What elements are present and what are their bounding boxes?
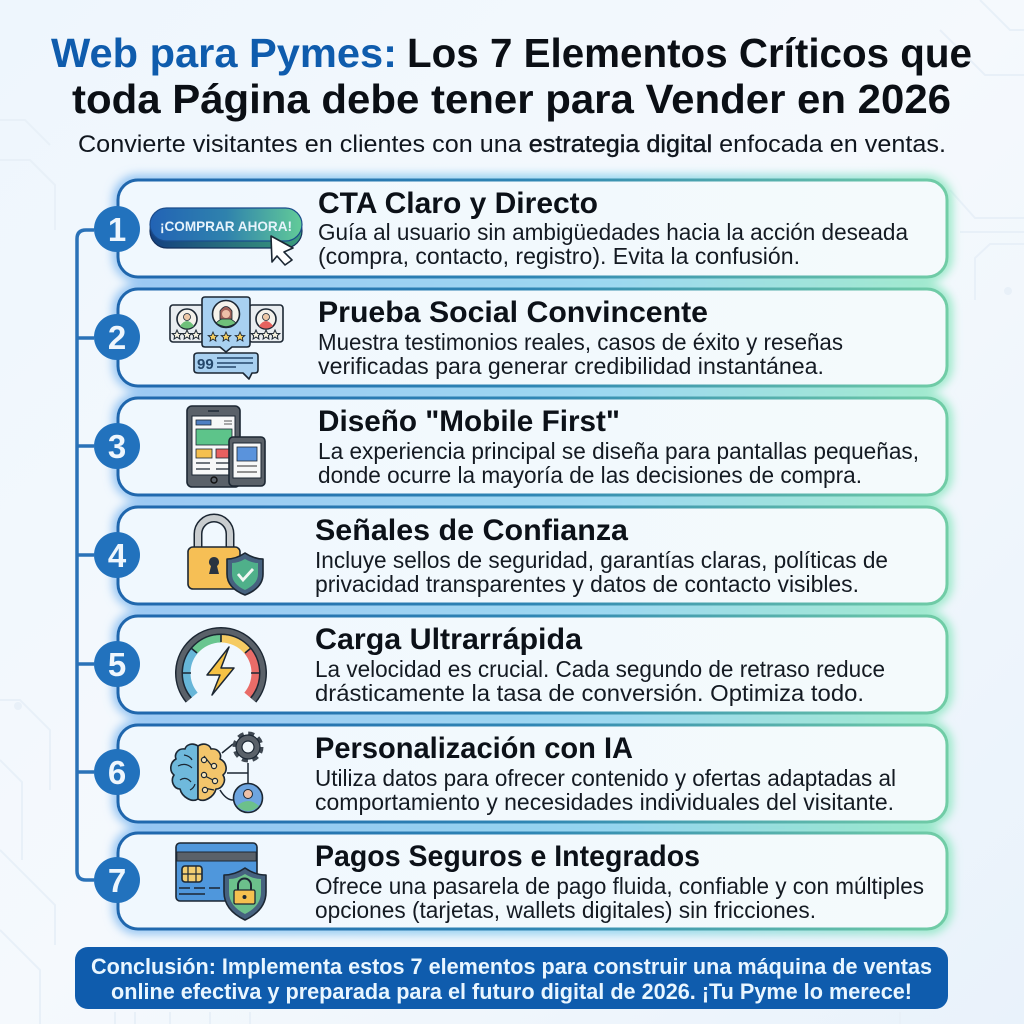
icon: padlock and shield <box>188 518 263 595</box>
text block 6 <box>315 765 896 815</box>
number badge 6 <box>94 749 140 795</box>
heading 6: Personalización con IA <box>315 732 633 765</box>
number badge 5 <box>94 641 140 687</box>
number badge 7 <box>94 857 140 903</box>
text block 1 <box>318 219 909 269</box>
text block 1: (compra, contacto, registro). Evita la confusión. <box>318 243 800 269</box>
panel: card 7 payments <box>94 833 947 929</box>
number badge 1: 1 <box>108 211 126 248</box>
icon: AI brain with gear and user <box>171 734 262 812</box>
conclusion banner <box>75 947 948 1009</box>
icon: tablet and phone <box>187 406 265 487</box>
heading 4: Señales de Confianza <box>315 514 628 547</box>
subtitle: Convierte visitantes en clientes con una estrategia digital enfocada en ventas. <box>78 131 946 158</box>
conclusion banner: Conclusión: Implementa estos 7 elementos para construir una máquina de ventas <box>91 954 932 979</box>
card frame 5 <box>118 616 947 713</box>
card frame 7 <box>118 833 947 929</box>
text block 3: donde ocurre la mayoría de las decisiones de compra. <box>318 462 862 488</box>
number badge 2: 2 <box>108 319 126 356</box>
card frame 2 <box>118 289 947 386</box>
heading 1: CTA Claro y Directo <box>318 187 598 220</box>
text block 4: Incluye sellos de seguridad, garantías claras, políticas de <box>315 547 888 573</box>
text block 3: La experiencia principal se diseña para pantallas pequeñas, <box>318 438 919 464</box>
text block 7: Ofrece una pasarela de pago fluida, confiable y con múltiples <box>315 873 924 899</box>
title: Los 7 Elementos Críticos que <box>407 30 972 76</box>
heading 2: Prueba Social Convincente <box>318 296 708 329</box>
icon: call to action button with cursor: ¡COMPRAR AHORA! <box>160 218 292 234</box>
heading 7: Pagos Seguros e Integrados <box>315 840 700 873</box>
conclusion banner: online efectiva y preparada para el futuro digital de 2026. ¡Tu Pyme lo merece! <box>111 979 912 1004</box>
text block 2 <box>318 329 843 379</box>
panel: card 1 CTA <box>94 180 947 277</box>
text block 5: drásticamente la tasa de conversión. Optimiza todo. <box>315 680 864 706</box>
number badge 3: 3 <box>108 428 126 465</box>
title: Web para Pymes: <box>51 30 397 76</box>
number badge 7: 7 <box>108 862 126 899</box>
text block 7 <box>315 873 924 923</box>
text block 6: Utiliza datos para ofrecer contenido y ofertas adaptadas al <box>315 765 896 791</box>
card frame 6 <box>118 725 947 822</box>
connector line <box>77 230 94 880</box>
text block 7: opciones (tarjetas, wallets digitales) sin fricciones. <box>315 897 816 923</box>
text block 4 <box>315 547 888 597</box>
icon: testimonials: 99 <box>197 356 214 373</box>
panel: card 6 AI <box>94 725 947 822</box>
panel: card 3 mobile first <box>94 398 947 495</box>
heading 3: Diseño "Mobile First" <box>318 405 620 438</box>
text block 2: verificadas para generar credibilidad instantánea. <box>318 353 824 379</box>
number badge 4: 4 <box>108 537 127 574</box>
title <box>51 30 972 122</box>
panel: card 2 social proof <box>94 289 947 386</box>
number badge 6: 6 <box>108 754 126 791</box>
text block 6: comportamiento y necesidades individuales del visitante. <box>315 789 894 815</box>
number badge 2 <box>94 314 140 360</box>
card glow <box>118 180 947 929</box>
icon: testimonials <box>170 297 283 379</box>
icon: call to action button with cursor <box>150 208 302 265</box>
text block 5: La velocidad es crucial. Cada segundo de retraso reduce <box>315 656 885 682</box>
card frame 4 <box>118 507 947 604</box>
text block 2: Muestra testimonios reales, casos de éxito y reseñas <box>318 329 843 355</box>
title: toda Página debe tener para Vender en 2026 <box>72 76 951 122</box>
text block 5 <box>315 656 885 706</box>
icon: speed gauge with bolt <box>179 631 263 700</box>
icon: credit card and shield <box>176 843 266 920</box>
text block 4: privacidad transparentes y datos de contacto visibles. <box>315 571 859 597</box>
heading 5: Carga Ultrarrápida <box>315 623 582 656</box>
card frame 1 <box>118 180 947 277</box>
panel: card 5 speed <box>94 616 947 713</box>
number badge 5: 5 <box>108 646 126 683</box>
card frame 3 <box>118 398 947 495</box>
number badge 3 <box>94 423 140 469</box>
number badge 4 <box>94 532 140 578</box>
text block 3 <box>318 438 919 488</box>
number badge 1 <box>94 206 140 252</box>
text block 1: Guía al usuario sin ambigüedades hacia la acción deseada <box>318 219 909 245</box>
panel: card 4 trust <box>94 507 947 604</box>
